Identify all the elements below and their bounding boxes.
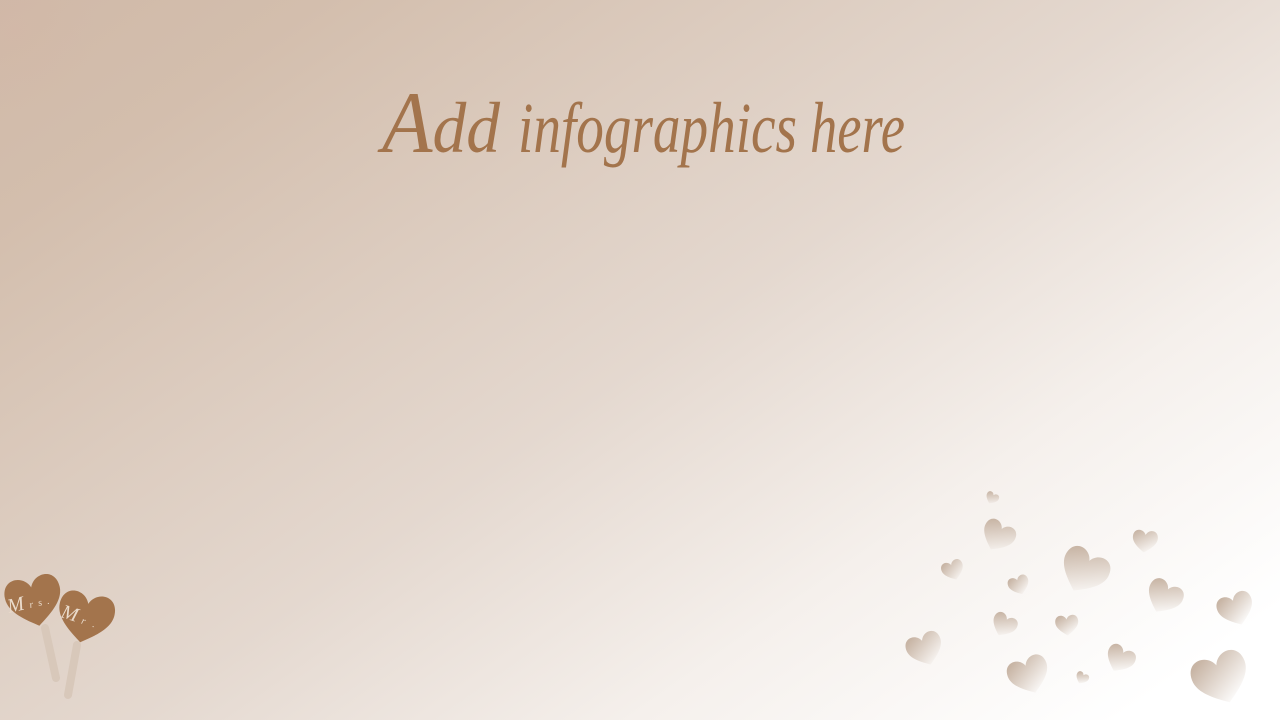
icon: lollipop hearts Mrs and Mr <box>2 571 118 695</box>
title: here <box>810 88 905 168</box>
title: infographics <box>518 88 797 168</box>
icon: Mrs heart on stick: Mrs. <box>4 587 51 618</box>
title: Add <box>377 75 501 172</box>
icon: Mr heart on stick: Mr . <box>58 600 99 632</box>
title <box>377 75 905 172</box>
decorative hearts cluster <box>903 490 1259 712</box>
